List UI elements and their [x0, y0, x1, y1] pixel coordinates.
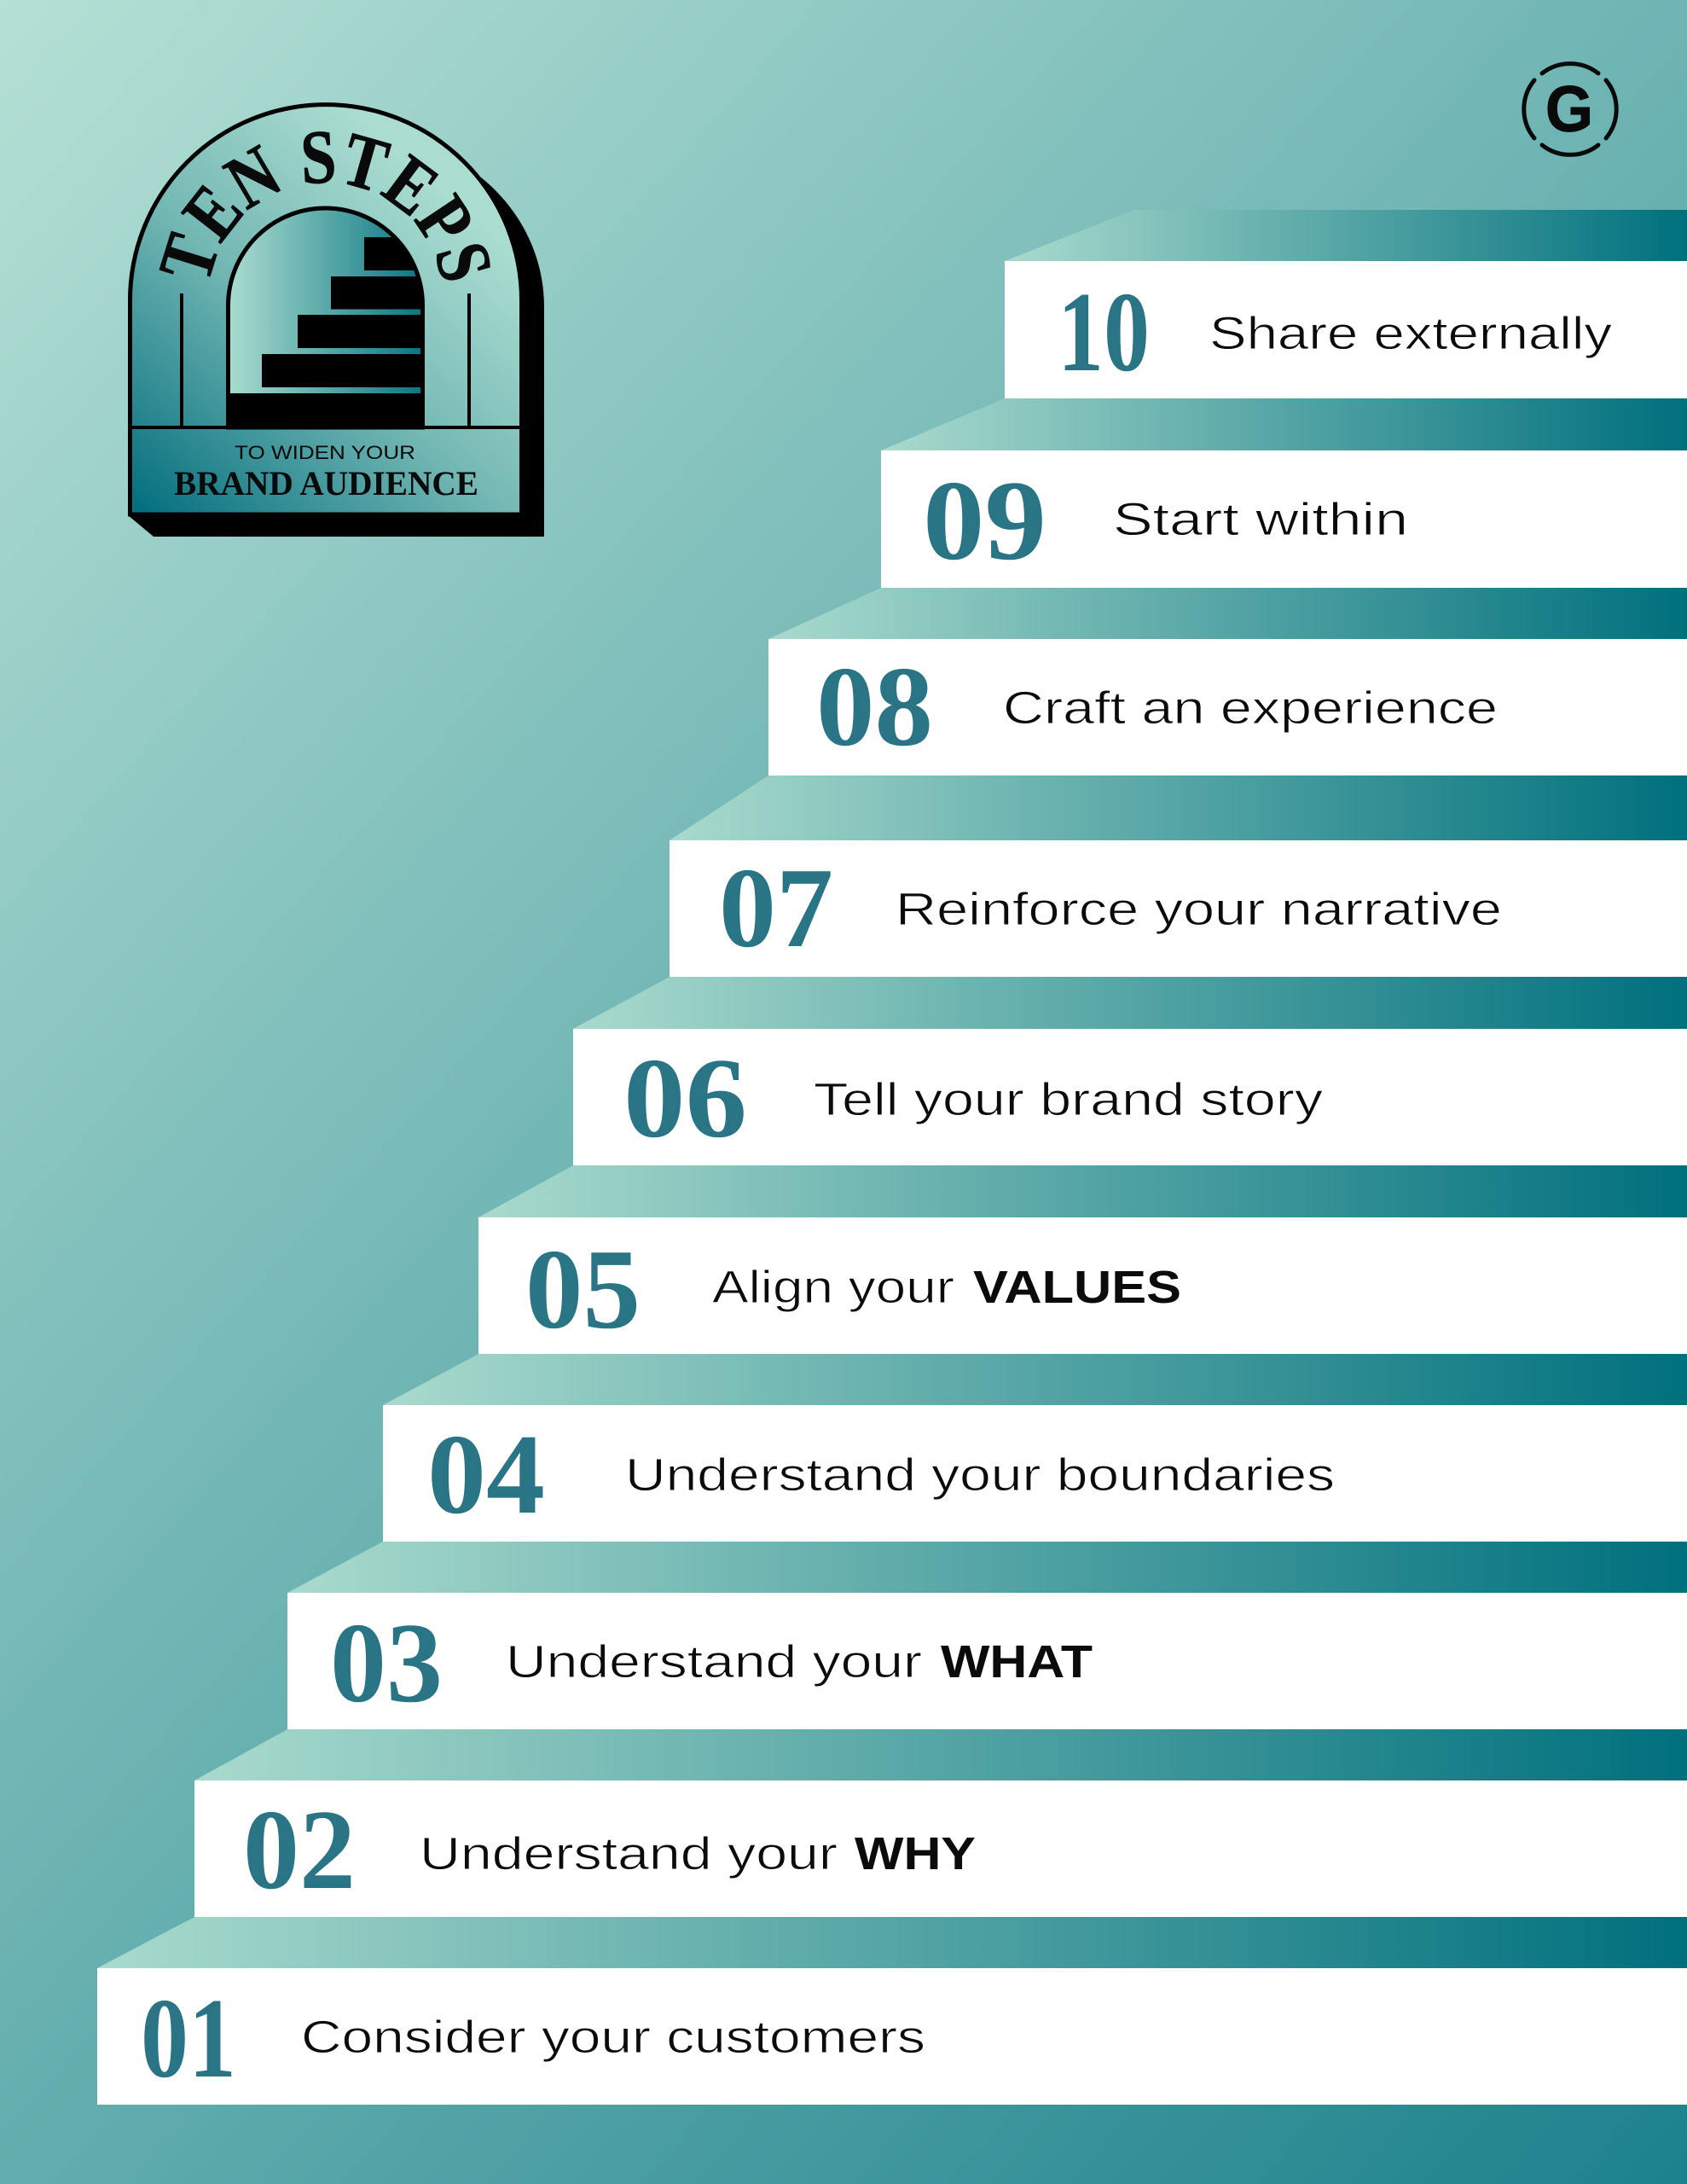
step 03: [287, 1542, 1687, 1729]
step 03 panel: [287, 1593, 1687, 1729]
step 05 number: 05: [525, 1226, 641, 1352]
step 05 bold label: VALUES: [973, 1262, 1181, 1313]
step 02 tread: [194, 1729, 1687, 1780]
step 01 tread: [97, 1917, 1687, 1968]
step 06 label: Tell your brand story: [814, 1074, 1323, 1125]
step 08 number: 08: [816, 643, 933, 770]
step 05 panel: [478, 1217, 1687, 1354]
step 04 tread: [383, 1354, 1687, 1405]
step 08 label: Craft an experience: [1003, 682, 1498, 734]
badge brand audience: BRAND AUDIENCE: [174, 464, 478, 502]
step 04 panel: [383, 1405, 1687, 1542]
step 08 tread: [768, 588, 1687, 639]
step 07 label: Reinforce your narrative: [896, 884, 1502, 935]
step 02 bold label: WHY: [855, 1828, 976, 1879]
step 05 tread: [478, 1165, 1687, 1217]
step 06 number: 06: [623, 1035, 747, 1161]
badge arch body: [130, 105, 522, 514]
step 04 number: 04: [427, 1411, 545, 1537]
step 08 panel: [768, 639, 1687, 775]
step 03 tread: [287, 1542, 1687, 1593]
step 09 number: 09: [923, 457, 1046, 584]
step 02 panel: [194, 1780, 1687, 1917]
step 01 panel: [97, 1968, 1687, 2105]
step 07 panel: [670, 840, 1687, 977]
step 07: [670, 775, 1687, 977]
step 07 number: 07: [719, 845, 833, 971]
step 09 label: Start within: [1113, 494, 1408, 545]
badge divider: [130, 426, 520, 429]
step 05: [478, 1165, 1687, 1354]
logo: G mark: G: [1545, 73, 1593, 146]
step 01: [97, 1917, 1687, 2105]
step 02 label: Understand your: [420, 1828, 838, 1879]
logo: G mark: [1524, 64, 1616, 154]
step 03 number: 03: [330, 1600, 443, 1726]
badge subtitle: TO WIDEN YOUR: [235, 442, 415, 463]
step 04: [383, 1354, 1687, 1542]
step 06: [573, 977, 1687, 1165]
step 10 label: Share externally: [1209, 308, 1612, 359]
column lines: [182, 293, 469, 427]
step 10 panel: [1005, 261, 1687, 398]
step 06 panel: [573, 1029, 1687, 1165]
step 01 number: 01: [141, 1975, 236, 2101]
step 10: [1005, 210, 1687, 398]
step 09 panel: [881, 450, 1687, 588]
doorway stairs: [226, 237, 425, 427]
step 10 number: 10: [1058, 269, 1150, 395]
step 02 number: 02: [243, 1786, 356, 1913]
step 05 label: Align your: [712, 1262, 954, 1313]
step 07 tread: [670, 775, 1687, 840]
step 09: [881, 398, 1687, 588]
step 09 tread: [881, 398, 1687, 450]
step 02: [194, 1729, 1687, 1917]
badge: ten steps title: [128, 102, 544, 537]
step 03 label: Understand your: [506, 1636, 922, 1687]
step 08: [768, 588, 1687, 775]
step 01 label: Consider your customers: [301, 2012, 925, 2063]
badge extruded shadow: [128, 119, 544, 537]
doorway: [229, 208, 423, 427]
step 10 tread: [1005, 210, 1687, 261]
step 06 tread: [573, 977, 1687, 1029]
badge title text: TEN STEPS: [159, 131, 490, 281]
step 04 label: Understand your boundaries: [625, 1449, 1335, 1501]
step 03 bold label: WHAT: [941, 1636, 1093, 1687]
